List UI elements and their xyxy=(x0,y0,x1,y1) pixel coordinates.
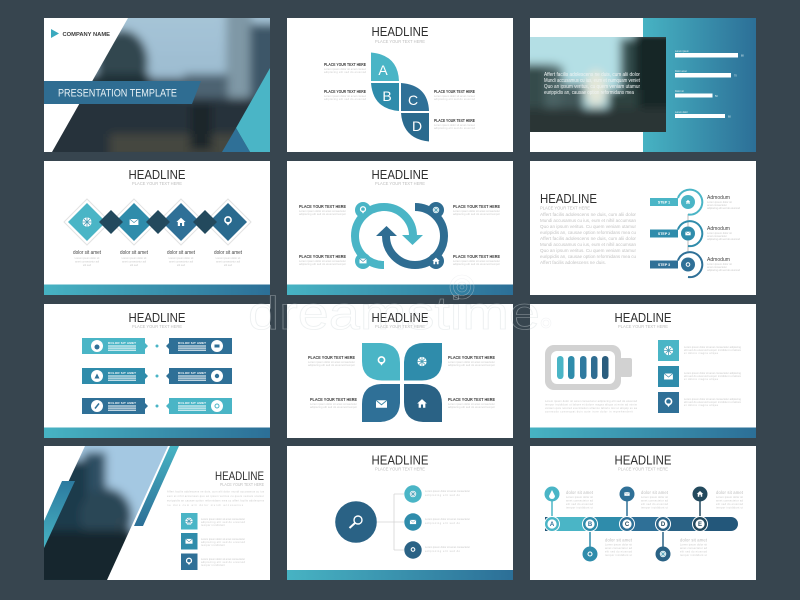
icon square text: adipiscing elit sed do eiusmod xyxy=(201,540,246,544)
diamond captions: dolor sit amet xyxy=(120,250,148,256)
node mail xyxy=(404,513,422,531)
blurred skyline photo xyxy=(44,446,168,580)
petal text left: PLACE YOUR TEXT HERE xyxy=(310,397,357,402)
headline: HEADLINE xyxy=(128,167,186,182)
step 3: STEP 3 xyxy=(658,263,670,267)
paragraph: eurippidis an causae option reformidans mea cu affert facilis adolescens xyxy=(167,498,265,502)
teal blue slanted bar xyxy=(134,446,179,526)
text block right upper xyxy=(434,89,476,101)
paragraph: Affert facilis adolescens ne duis, cum alii dolor mundi accusamus cu ius xyxy=(167,490,265,494)
diamond captions: elit sed xyxy=(83,263,92,267)
connector line xyxy=(687,214,689,253)
cycle text left: PLACE YOUR TEXT HERE xyxy=(299,254,346,259)
cycle text right: Lorem ipsum dolor sit amet consectetur xyxy=(453,259,500,263)
company logo xyxy=(51,29,110,38)
timeline text above xyxy=(566,490,744,510)
timeline text above: dolor sit amet xyxy=(566,490,594,495)
tab text: DOLOR SIT AMET xyxy=(178,341,206,345)
step captions: adipiscing elit sed do eiusmod xyxy=(707,237,741,241)
photo caption: eurippidis an, causae option reformidans mea xyxy=(544,90,634,96)
cycle text right: adipiscing elit sed do eiusmod tempor xyxy=(453,212,500,216)
left headline: HEADLINE xyxy=(540,191,597,206)
petal top right xyxy=(404,343,442,380)
headline: PLACE YOUR TEXT HERE xyxy=(375,324,425,329)
icon square text: elit sed do eiusmod tempor incididunt ut labore xyxy=(684,374,742,378)
cycle text left: Lorem ipsum dolor sit amet consectetur xyxy=(299,209,346,213)
progress bars: Lorem ipsum xyxy=(675,50,689,53)
petal text left: Lorem ipsum dolor sit amet consectetur xyxy=(308,360,355,364)
leaf C: C xyxy=(408,92,418,108)
node text: Lorem ipsum dolor sit amet consectetur xyxy=(425,489,470,493)
timeline text above: tempor incididunt ut xyxy=(716,506,743,510)
battery paragraph xyxy=(545,399,638,414)
blurred city photo xyxy=(52,18,270,152)
footer bar xyxy=(44,428,270,438)
icon square text: elit sed do eiusmod tempor incididunt ut labore xyxy=(684,400,742,404)
left headline xyxy=(540,191,597,210)
node text: adipiscing elit sed do xyxy=(425,493,461,497)
diamond captions: dolor sit amet xyxy=(73,250,101,256)
step captions: amet consectetur xyxy=(707,234,727,238)
bottom icon circles xyxy=(582,546,670,562)
step captions: Admodum xyxy=(707,226,730,232)
tab text: DOLOR SIT AMET xyxy=(178,401,206,405)
headline: PLACE YOUR TEXT HERE xyxy=(375,181,425,186)
timeline text above: Lorem ipsum dolor sit xyxy=(566,495,593,499)
photo caption xyxy=(544,72,641,96)
text block right lower xyxy=(434,118,476,130)
left paragraph: Affert facilis adolescens ne duis. xyxy=(540,260,606,265)
text block right lower: PLACE YOUR TEXT HERE xyxy=(434,118,475,123)
step captions: Lorem ipsum dolor sit xyxy=(707,262,732,266)
icon square mail xyxy=(658,366,679,387)
text block lower left xyxy=(324,89,367,101)
petal text left: PLACE YOUR TEXT HERE xyxy=(308,355,355,360)
text block right upper: PLACE YOUR TEXT HERE xyxy=(434,89,475,94)
leaf A xyxy=(371,52,399,81)
text block right upper: adipiscing elit sed do eiusmod xyxy=(434,97,476,101)
text block lower left: Lorem ipsum dolor sit amet consec xyxy=(324,94,367,98)
timeline text above: elit sed do eiusmod xyxy=(641,502,669,506)
diamond captions: amet consectetur adi xyxy=(169,260,193,264)
battery paragraph: commodo consequat duis aute irure dolor in reprehenderit xyxy=(545,410,633,414)
leaf D: D xyxy=(412,118,422,134)
cycle text left xyxy=(299,204,346,266)
diamond 1 globe xyxy=(64,199,110,245)
progress bars xyxy=(675,50,744,118)
diamond captions: amet consectetur adi xyxy=(75,260,99,264)
footer bar xyxy=(530,428,756,438)
headline: HEADLINE xyxy=(128,310,186,325)
right tabs xyxy=(166,338,232,414)
left paragraph: Affert facilis adolescens ne duis, cum alii dolor xyxy=(540,236,637,241)
node C: C xyxy=(625,522,630,528)
magnifier circle xyxy=(335,501,377,543)
headline: HEADLINE xyxy=(372,167,429,182)
diamond captions: elit sed xyxy=(177,263,186,267)
tab text: DOLOR SIT AMET xyxy=(108,401,136,405)
step 2 xyxy=(650,221,702,246)
icon square text xyxy=(201,517,246,567)
text block right upper: Lorem ipsum dolor sit amet consec xyxy=(434,94,476,98)
photo caption: Mundi accusamus cu ius, eum et numquam veniet xyxy=(544,78,641,84)
timeline text above: Lorem ipsum dolor sit xyxy=(641,495,668,499)
icon square pin xyxy=(658,392,679,413)
text block top left: PLACE YOUR TEXT HERE xyxy=(324,62,366,67)
timeline text above: elit sed do eiusmod xyxy=(716,502,744,506)
icon square text: Lorem ipsum dolor sit amet consectetur adipiscing xyxy=(684,371,742,375)
panel: cover slide xyxy=(44,18,270,152)
diamond captions: elit sed xyxy=(130,263,139,267)
node text xyxy=(425,489,470,553)
teal cycle arrow xyxy=(355,202,423,269)
petal text right: adipiscing elit sed do eiusmod tempor xyxy=(448,363,495,367)
cycle text right: PLACE YOUR TEXT HERE xyxy=(453,254,500,259)
step 2: STEP 2 xyxy=(658,232,670,236)
left paragraph: Quo an ipsum veritus. Cu quem veniam utamur xyxy=(540,248,637,253)
panel: search tree slide xyxy=(287,446,513,580)
node D: D xyxy=(661,522,666,528)
node target xyxy=(404,541,422,559)
step 1: STEP 1 xyxy=(658,200,670,204)
step captions: adipiscing elit sed do eiusmod xyxy=(707,268,741,272)
icon square text: Lorem ipsum dolor sit amet consectetur adipiscing xyxy=(684,345,742,349)
cycle text right: Lorem ipsum dolor sit amet consectetur xyxy=(453,209,500,213)
petal top left xyxy=(362,343,400,380)
footer bar xyxy=(287,284,513,295)
left paragraph: Affert facilis adolescens ne duis, cum alii dolor xyxy=(540,212,637,217)
timeline text above: tempor incididunt ut xyxy=(566,506,593,510)
cycle text left: Lorem ipsum dolor sit amet consectetur xyxy=(299,259,346,263)
blurred photo xyxy=(530,37,666,132)
blue cycle arrow xyxy=(376,202,444,269)
step captions: adipiscing elit sed do eiusmod xyxy=(707,206,741,210)
icon square text: adipiscing elit sed do eiusmod xyxy=(201,560,246,564)
timeline text below: Lorem ipsum dolor sit xyxy=(605,542,632,546)
step captions: amet consectetur xyxy=(707,203,727,207)
diamond captions: Lorem ipsum dolor sit xyxy=(122,256,147,260)
panel: timeline slide xyxy=(530,446,756,580)
leaf A: A xyxy=(378,62,388,78)
footer bar xyxy=(287,570,513,580)
left paragraph: Mundi accusamus cu ius, eum et nihil accumsan xyxy=(540,218,637,223)
node text: adipiscing elit sed do xyxy=(425,521,461,525)
step captions: Lorem ipsum dolor sit xyxy=(707,231,732,235)
progress bars: 80 xyxy=(741,54,744,58)
step captions xyxy=(707,195,741,272)
headline: PLACE YOUR TEXT HERE xyxy=(132,181,182,186)
headline: HEADLINE xyxy=(614,310,672,325)
headline: PLACE YOUR TEXT HERE xyxy=(618,324,668,329)
panel: diagonal photo slide xyxy=(44,446,270,580)
panel: battery slide xyxy=(530,304,756,438)
step captions: Admodum xyxy=(707,257,730,263)
progress bars: 50 xyxy=(715,95,718,98)
icon square text: et dolore magna aliqua xyxy=(684,403,719,407)
timeline text below: tempor incididunt ut xyxy=(680,553,707,557)
progress bars: Lorem dolor xyxy=(675,111,688,114)
icon square text: tempor incididunt xyxy=(201,563,225,567)
icon square text: elit sed do eiusmod tempor incididunt ut labore xyxy=(684,348,742,352)
headline: PLACE YOUR TEXT HERE xyxy=(375,39,425,44)
panel: petals slide xyxy=(287,304,513,438)
petal text right: Lorem ipsum dolor sit amet consectetur xyxy=(448,402,495,406)
step captions: amet consectetur xyxy=(707,265,727,269)
timeline text above: amet consectetur ad xyxy=(641,498,669,502)
footer bar xyxy=(44,284,270,295)
leaf C xyxy=(401,83,429,111)
diamond 3 home xyxy=(158,199,204,245)
icon square mail xyxy=(181,533,198,550)
icon square globe xyxy=(658,340,679,361)
headline: HEADLINE xyxy=(614,452,672,468)
petal text right: PLACE YOUR TEXT HERE xyxy=(448,355,495,360)
panel: paired tabs slide xyxy=(44,304,270,438)
timeline text below: amet consectetur ad xyxy=(680,546,708,550)
icon square text xyxy=(684,345,742,407)
icon square pin xyxy=(181,554,198,570)
left tabs xyxy=(82,338,148,414)
headline: PLACE YOUR TEXT HERE xyxy=(375,466,425,472)
headline: PLACE YOUR TEXT HERE xyxy=(132,324,182,329)
cycle text right: adipiscing elit sed do eiusmod tempor xyxy=(453,262,500,266)
icon square text: Lorem ipsum dolor sit amet consectetur xyxy=(201,517,245,521)
petal text left: Lorem ipsum dolor sit amet consectetur xyxy=(310,402,357,406)
left paragraph: Mundi accusamus cu ius, eum et nihil accumsan xyxy=(540,242,637,247)
cycle text left: adipiscing elit sed do eiusmod tempor xyxy=(299,212,346,216)
center dots xyxy=(156,344,158,408)
gradient side panel xyxy=(643,18,756,152)
text block top left: Lorem ipsum dolor sit amet consec xyxy=(324,67,367,71)
panel: ABCD leaf slide xyxy=(287,18,513,152)
node B: B xyxy=(588,522,593,528)
title banner xyxy=(44,81,201,104)
timeline text above: dolor sit amet xyxy=(641,490,669,495)
panel: steps slide xyxy=(530,161,756,295)
battery paragraph: tempor incididunt ut labore et dolore magna aliqua ut enim ad minim xyxy=(545,402,637,406)
icon square text: et dolore magna aliqua xyxy=(684,377,719,381)
cycle icons xyxy=(359,207,440,264)
tree connector xyxy=(377,494,404,550)
timeline text below: Lorem ipsum dolor sit xyxy=(680,542,707,546)
cycle text right: PLACE YOUR TEXT HERE xyxy=(453,204,500,209)
diamond captions: dolor sit amet xyxy=(214,250,242,256)
diamond captions: dolor sit amet xyxy=(167,250,195,256)
node text: Lorem ipsum dolor sit amet consectetur xyxy=(425,545,470,549)
timeline text below: tempor incididunt ut xyxy=(605,553,632,557)
leaf B: B xyxy=(382,88,392,104)
petal text right: Lorem ipsum dolor sit amet consectetur xyxy=(448,360,495,364)
diamond 4 pin xyxy=(205,199,251,245)
node stems xyxy=(552,494,700,554)
panel: cycle arrows slide xyxy=(287,161,513,295)
left paragraph: eurippidis an, causae option reformidans mea cu xyxy=(540,254,637,259)
timeline text above: elit sed do eiusmod xyxy=(566,502,594,506)
paragraph xyxy=(167,490,265,507)
diamond captions: amet consectetur adi xyxy=(122,260,146,264)
blue corner triangle xyxy=(222,128,250,152)
left paragraph xyxy=(540,212,637,265)
watermark xyxy=(248,275,551,339)
left headline: PLACE YOUR TEXT HERE xyxy=(540,206,590,210)
text block top left: adipiscing elit sed do eiusmod xyxy=(324,70,367,74)
tab text xyxy=(108,341,206,411)
icon square text: tempor incididunt xyxy=(201,543,225,547)
diamond captions xyxy=(73,250,242,267)
node globe xyxy=(404,485,422,503)
node A: A xyxy=(550,522,555,528)
text block right lower: adipiscing elit sed do eiusmod xyxy=(434,126,476,130)
petal bottom right xyxy=(404,384,442,422)
icon square text: et dolore magna aliqua xyxy=(684,351,719,355)
cycle text left: adipiscing elit sed do eiusmod tempor xyxy=(299,262,346,266)
icon square text: Lorem ipsum dolor sit amet consectetur xyxy=(201,557,245,561)
text block lower left: adipiscing elit sed do eiusmod xyxy=(324,97,367,101)
progress bars: 60 xyxy=(728,116,731,118)
paragraph: ne duis cum alii dolor mundi accusamus xyxy=(167,503,244,507)
leaf B xyxy=(371,83,399,111)
timeline text above: Lorem ipsum dolor sit xyxy=(716,495,743,499)
icon square text: tempor incididunt xyxy=(201,523,225,527)
timeline text below: elit sed do eiusmod xyxy=(680,550,708,554)
text block lower left: PLACE YOUR TEXT HERE xyxy=(324,89,366,94)
company logo: COMPANY NAME xyxy=(62,32,110,38)
cycle text right xyxy=(453,204,500,266)
icon square text: Lorem ipsum dolor sit amet consectetur xyxy=(201,537,245,541)
headline: PLACE YOUR TEXT HERE xyxy=(618,466,668,472)
timeline text below: elit sed do eiusmod xyxy=(605,550,633,554)
step captions: Lorem ipsum dolor sit xyxy=(707,200,732,204)
teal corner triangle xyxy=(236,68,270,152)
node B xyxy=(582,516,598,532)
node D xyxy=(656,516,670,532)
watermark: dreamstime xyxy=(248,287,540,339)
timeline text above: dolor sit amet xyxy=(716,490,744,495)
step 1 xyxy=(650,190,702,215)
battery paragraph: Lorem ipsum dolor sit amet consectetur adipiscing elit sed do eiusmod xyxy=(545,399,638,403)
left paragraph: eurippidis an, causae option reformidans mea cu xyxy=(540,230,637,235)
petal text right xyxy=(448,355,495,409)
timeline text above: amet consectetur ad xyxy=(716,498,744,502)
headline xyxy=(372,24,429,44)
battery paragraph: veniam quis nostrud exercitation ullamco laboris nisi ut aliquip ex ea xyxy=(545,406,638,410)
progress bars: Dolor amet xyxy=(675,70,687,73)
node E xyxy=(692,516,708,532)
timeline text below: amet consectetur ad xyxy=(605,546,633,550)
text block top left xyxy=(324,62,367,74)
title banner: PRESENTATION TEMPLATE xyxy=(58,88,177,100)
battery icon xyxy=(545,345,632,390)
tab text: DOLOR SIT AMET xyxy=(178,371,206,375)
tab text: DOLOR SIT AMET xyxy=(108,371,136,375)
photo caption: Quo an ipsum veritus, cu quem veniam utamur xyxy=(544,84,640,90)
petal text left: adipiscing elit sed do eiusmod tempor xyxy=(310,405,357,409)
timeline text above: amet consectetur ad xyxy=(566,498,594,502)
diamond captions: Lorem ipsum dolor sit xyxy=(75,256,100,260)
node A xyxy=(544,516,560,532)
timeline bar xyxy=(545,517,738,531)
headline: HEADLINE xyxy=(372,452,429,468)
progress bars: 70 xyxy=(734,74,737,78)
timeline text above: tempor incididunt ut xyxy=(641,506,668,510)
icon square globe xyxy=(181,513,198,530)
timeline text below: dolor sit amet xyxy=(680,538,708,542)
step 3 xyxy=(650,252,702,277)
tab text: DOLOR SIT AMET xyxy=(108,341,136,345)
panel: photo and progress slide xyxy=(520,18,756,152)
diamond captions: amet consectetur adi xyxy=(216,260,240,264)
paragraph: eum et nihil accumsan quo an ipsum veritus cu quem veniam utamur xyxy=(167,494,264,498)
cycle text left: PLACE YOUR TEXT HERE xyxy=(299,204,346,209)
panel: diamond chain slide xyxy=(44,161,270,295)
icon square text: Lorem ipsum dolor sit amet consectetur adipiscing xyxy=(684,397,742,401)
headline: HEADLINE xyxy=(215,469,264,483)
timeline text below xyxy=(605,538,708,557)
diamond captions: elit sed xyxy=(224,263,233,267)
icon square text: adipiscing elit sed do eiusmod xyxy=(201,520,246,524)
node text: Lorem ipsum dolor sit amet consectetur xyxy=(425,517,470,521)
small dark diamonds xyxy=(99,210,217,234)
left slanted bar xyxy=(44,481,75,548)
headline: HEADLINE xyxy=(372,24,429,39)
text block right lower: Lorem ipsum dolor sit amet consec xyxy=(434,123,476,127)
progress bars: Dolor sit xyxy=(675,90,684,93)
diamond captions: Lorem ipsum dolor sit xyxy=(216,256,241,260)
diamond captions: Lorem ipsum dolor sit xyxy=(169,256,194,260)
leaf D xyxy=(401,113,429,142)
petal text right: adipiscing elit sed do eiusmod tempor xyxy=(448,405,495,409)
node text: adipiscing elit sed do xyxy=(425,549,461,553)
petal text right: PLACE YOUR TEXT HERE xyxy=(448,397,495,402)
petal text left xyxy=(308,355,357,409)
headline xyxy=(215,469,264,487)
headline: HEADLINE xyxy=(372,310,429,325)
step captions: Admodum xyxy=(707,195,730,201)
node C xyxy=(620,516,634,532)
timeline text below: dolor sit amet xyxy=(605,538,633,542)
petal bottom left xyxy=(362,384,400,422)
left paragraph: Quo an ipsum veritus. Cu quem veniam utamur xyxy=(540,224,637,229)
top icon circles xyxy=(544,486,708,502)
diamond 2 mail xyxy=(111,199,157,245)
photo caption: Affert facilis adolescens ne duis, cum alii dolor xyxy=(544,72,640,78)
headline: PLACE YOUR TEXT HERE xyxy=(220,482,264,487)
petal text left: adipiscing elit sed do eiusmod tempor xyxy=(308,363,355,367)
node E: E xyxy=(698,522,702,528)
